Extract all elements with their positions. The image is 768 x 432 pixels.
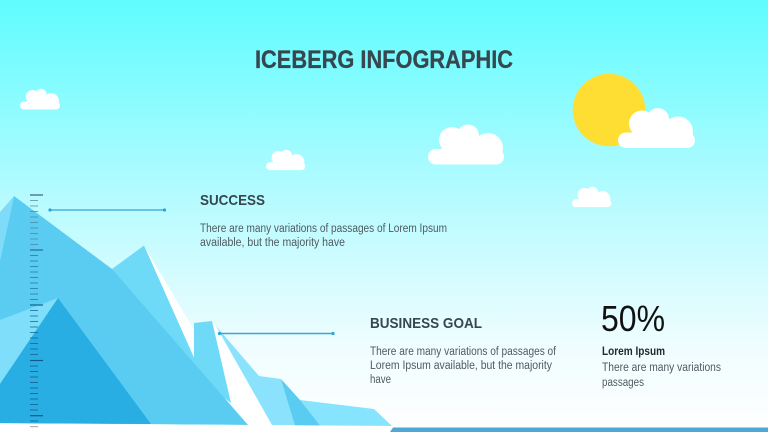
- icon: cloud right small: [572, 187, 611, 207]
- stat: 50 percent: passages: [602, 377, 644, 389]
- icon: sun: [573, 74, 645, 146]
- icon: cloud centre small: [266, 150, 305, 170]
- stat: 50 percent: There are many variations: [602, 362, 721, 374]
- depth ruler: [30, 195, 43, 427]
- iceberg illustration: [0, 196, 392, 432]
- connector: business goal: [218, 332, 335, 335]
- text block: success: There are many variations of passages of Lorem Ipsum: [200, 223, 447, 235]
- text block: success: available, but the majority have: [200, 237, 345, 249]
- icon: cloud centre large: [428, 124, 504, 164]
- water strip: [390, 428, 768, 432]
- text block: business goal: [370, 315, 557, 386]
- icon: cloud over sun: [618, 108, 695, 148]
- stat: 50 percent: Lorem Ipsum: [602, 346, 665, 358]
- stat: 50 percent: [601, 298, 721, 389]
- stat: 50 percent: 50%: [601, 298, 665, 339]
- text block: business goal: BUSINESS GOAL: [370, 315, 482, 332]
- icon: cloud top left: [20, 89, 60, 110]
- text block: business goal: There are many variations of passages of: [370, 346, 557, 358]
- connector: success: [48, 208, 166, 212]
- text block: success: [200, 192, 447, 249]
- title: ICEBERG INFOGRAPHIC: [255, 46, 513, 74]
- text block: business goal: have: [370, 374, 391, 386]
- text block: success: SUCCESS: [200, 192, 265, 209]
- text block: business goal: Lorem Ipsum available, but the majority: [370, 360, 552, 372]
